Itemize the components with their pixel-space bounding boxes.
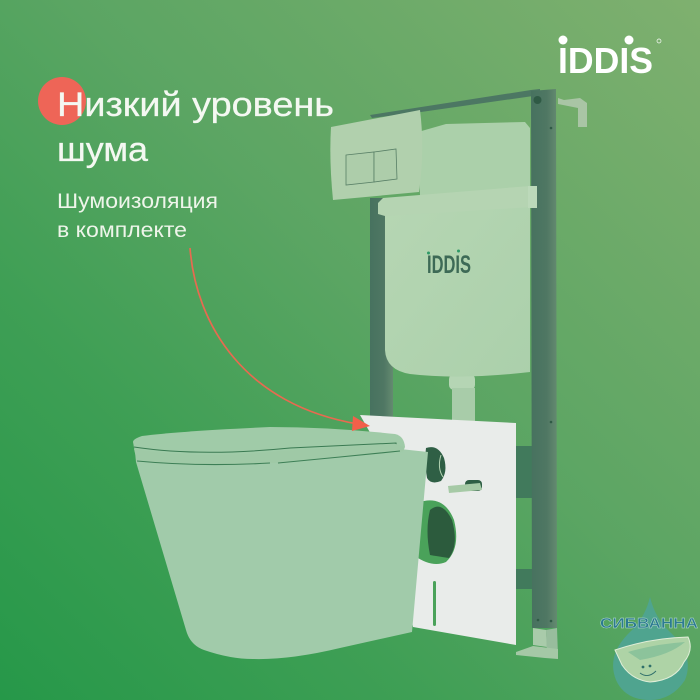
large hole: [415, 500, 456, 564]
subtitle: в комплекте: [57, 219, 187, 242]
cistern tank: [378, 122, 537, 377]
subtitle: Шумоизоляция: [57, 190, 218, 213]
flush plate: [330, 110, 422, 200]
seat: [133, 427, 405, 458]
lower seat ring: [134, 444, 404, 465]
brand logo: IDDIS: [558, 40, 653, 81]
title: Низкий уровень: [57, 86, 334, 124]
foot: [533, 628, 547, 647]
mounting band: [378, 186, 533, 216]
bowl shadow: [137, 451, 400, 465]
lower cross bars: [516, 446, 533, 498]
slot: [433, 581, 436, 626]
red accent circle: [38, 77, 86, 125]
upper hole: [425, 447, 445, 482]
left post: [370, 198, 393, 423]
seat gap: [134, 443, 397, 452]
tank logo: [427, 250, 471, 279]
wall bracket: [558, 98, 587, 127]
subtitle: [57, 190, 218, 242]
arrow: [190, 248, 370, 431]
title: [57, 86, 334, 169]
upper tank body: [418, 122, 530, 196]
watermark: Сибванна: [600, 597, 698, 700]
drain pipe: [449, 374, 475, 422]
white sound-insulation plate: [360, 415, 516, 645]
tank logo: IDDIS: [427, 251, 471, 279]
toilet bowl: [133, 427, 428, 659]
flush buttons: [346, 149, 397, 185]
bathtub: [615, 637, 690, 682]
installation frame: [370, 89, 587, 659]
title: шума: [57, 131, 148, 169]
water drop: [613, 597, 688, 700]
pipe stub: [448, 480, 482, 493]
top bar: [370, 89, 540, 118]
wordmark: СИБВАННА: [600, 615, 698, 632]
bathtub face: [640, 665, 656, 676]
right post: [531, 89, 557, 628]
